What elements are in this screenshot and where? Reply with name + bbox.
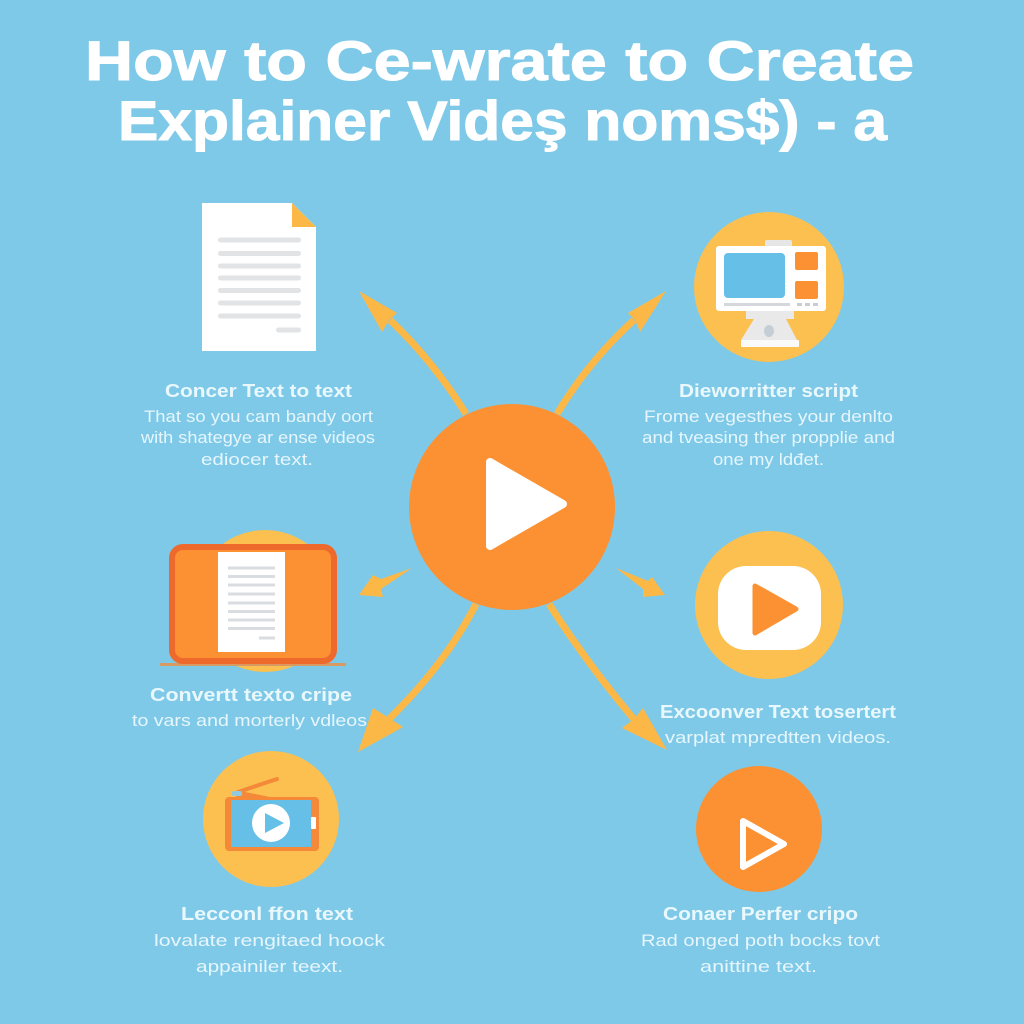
title: How to Ce-wrate to Create (85, 29, 914, 92)
arrow: top right (557, 291, 666, 414)
body text (641, 932, 880, 976)
body text: one my ldđet. (713, 451, 824, 469)
body text: appainiler teext. (196, 958, 343, 976)
body text: That so you cam bandy oort (144, 408, 373, 426)
heading: Lecconl ffon text (181, 904, 353, 924)
body text (154, 932, 386, 976)
arrow: middle left (359, 568, 412, 597)
body text: and tveasing ther propplie and (642, 429, 895, 447)
heading: Convertt texto cripe (150, 685, 352, 705)
arrow: middle right (616, 568, 665, 597)
body text: with shategye ar ense videos (140, 429, 375, 447)
icon: laptop with script (160, 530, 346, 672)
body text: varplat mpredtten videos. (665, 729, 891, 747)
title: Explainer Videş noms$) - a (118, 89, 888, 152)
heading: Conaer Perfer cripo (663, 904, 858, 924)
icon: document (202, 203, 316, 351)
arrows radiating from the centre (358, 291, 667, 752)
body text (140, 408, 375, 469)
panel: middle right video (660, 531, 896, 747)
icon: outlined play (696, 766, 822, 892)
body text: to vars and morterly vdleos (132, 712, 367, 730)
arrow: bottom right (549, 604, 667, 750)
icon: video play tile (695, 531, 843, 679)
title (85, 29, 914, 152)
body text: Rad onged poth bocks tovt (641, 932, 880, 950)
body text: lovalate rengitaed hoock (154, 932, 386, 950)
panel: bottom left tablet (154, 751, 386, 976)
arrow: top left (359, 291, 466, 414)
panel: top left document (140, 203, 375, 469)
body text: Frome vegesthes your denlto (644, 408, 893, 426)
panel: bottom right play (641, 766, 880, 976)
body text: ediocer text. (201, 451, 313, 469)
body text: anittine text. (700, 958, 817, 976)
heading: Excoonver Text tosertert (660, 702, 896, 722)
body text (642, 408, 895, 469)
panel: middle left laptop (132, 530, 367, 730)
arrow: bottom left (358, 604, 476, 752)
icon: monitor (694, 212, 844, 362)
heading: Concer Text to text (165, 381, 352, 401)
panel: top right monitor (642, 212, 895, 469)
centre play button (409, 404, 615, 610)
icon: tablet with play (203, 751, 339, 887)
heading: Dieworritter script (679, 381, 858, 401)
